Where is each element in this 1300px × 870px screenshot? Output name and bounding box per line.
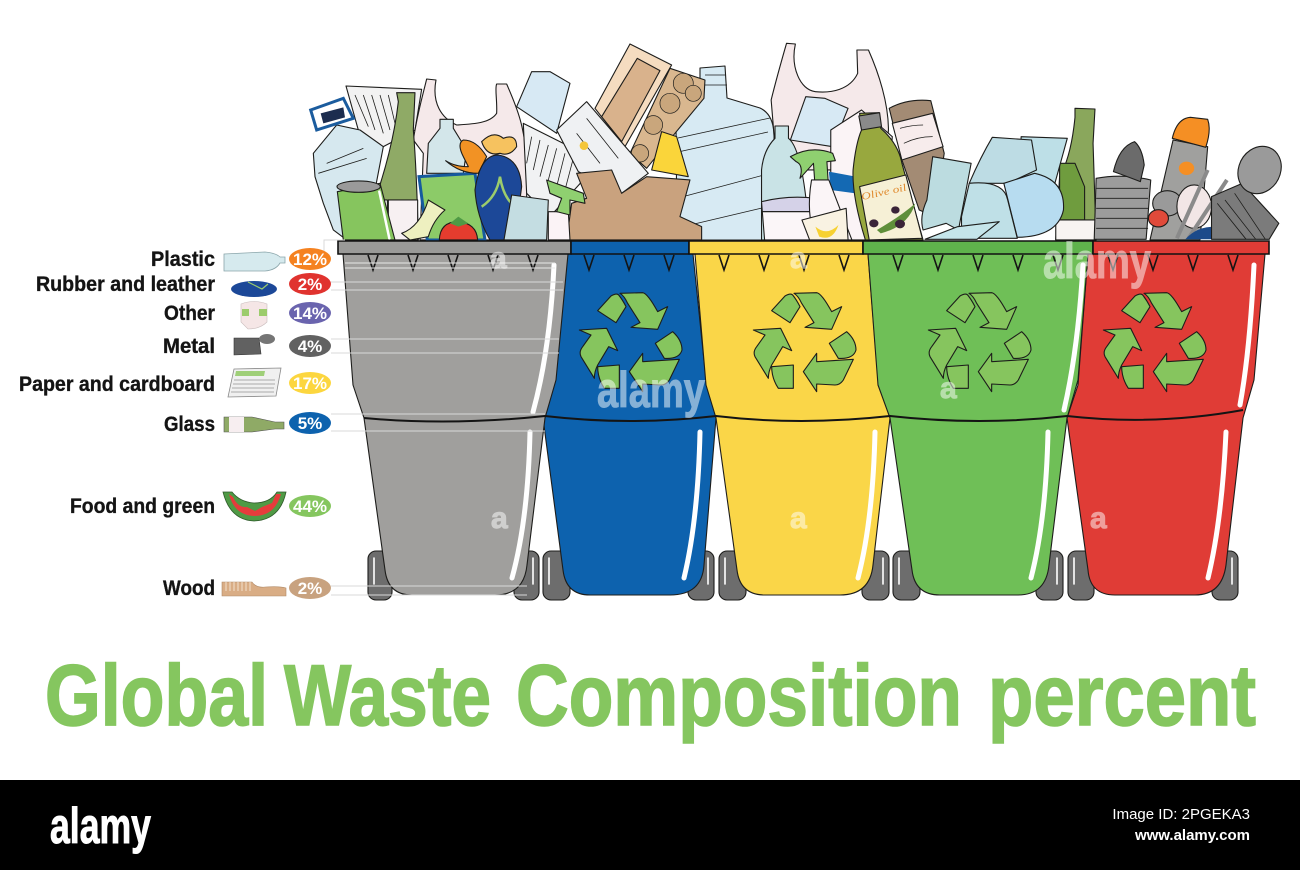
legend: Paper and cardboard: 17%: [293, 374, 327, 393]
legend: Paper and cardboard: [19, 368, 331, 397]
flip-flop: [475, 155, 522, 240]
legend: Food and green: Food and green: [70, 495, 215, 518]
food board: [419, 173, 485, 240]
legend: Rubber and leather: [36, 273, 331, 297]
legend: Other: Other: [164, 302, 215, 325]
bin separators: [364, 410, 1243, 422]
icon: watermelon: [223, 492, 286, 521]
legend: Wood: Wood: [163, 577, 215, 600]
image watermarks: alamy: [597, 362, 705, 418]
icon: recycling symbol: [753, 293, 856, 392]
bin rims: [338, 241, 1269, 254]
wheels: [368, 551, 1238, 600]
brown bottle: [889, 100, 944, 217]
image watermarks: a: [790, 242, 807, 275]
legend: Plastic: 12%: [293, 250, 327, 269]
legend: Metal: [163, 334, 331, 358]
title: [45, 648, 1256, 744]
scissors and small scraps: [1148, 170, 1227, 239]
icon: tin can: [234, 334, 275, 355]
title: percent: [988, 648, 1256, 744]
water bottle: [762, 126, 815, 240]
legend: Wood: 2%: [298, 579, 322, 598]
food tray: [595, 44, 672, 147]
blue flask: [829, 172, 856, 193]
image watermarks: alamy: [1043, 233, 1151, 289]
tin can: [1094, 142, 1151, 239]
plastic film roll: [790, 97, 848, 147]
image watermarks: a: [940, 372, 957, 405]
legend: Plastic: [151, 248, 331, 271]
left water jug: [311, 98, 383, 240]
orange cap aerosol: [1150, 117, 1209, 240]
glass pieces: [922, 137, 1067, 239]
footer logo: alamy: [50, 798, 151, 854]
legend: Other: [164, 302, 331, 329]
legend: Glass: [164, 412, 331, 436]
legend: Rubber and leather: Rubber and leather: [36, 273, 215, 296]
icon: diaper: [241, 302, 267, 329]
footer bar: [0, 780, 1300, 870]
legend: Plastic: Plastic: [151, 248, 215, 271]
yellow detergent bottle: [652, 132, 688, 177]
image watermarks: a: [491, 502, 508, 535]
icon: recycling symbol: [579, 293, 682, 392]
legend: Glass: Glass: [164, 413, 215, 436]
green bottle: [1056, 108, 1096, 240]
waste pile: right half: [762, 43, 1287, 240]
olive oil bottle: [853, 113, 923, 240]
plastic bag: [413, 79, 527, 240]
waste pile: left half: [311, 44, 705, 240]
rim notches: [368, 255, 1238, 270]
image watermarks: a: [790, 502, 807, 535]
spray bottle: [547, 180, 585, 240]
title: Waste: [284, 648, 491, 744]
big water jug: [676, 66, 774, 240]
image watermarks: a: [490, 242, 507, 275]
newspaper: [523, 123, 583, 217]
crushed can: [1212, 142, 1287, 239]
glass cup: [504, 195, 548, 240]
white plastic bag: [771, 43, 888, 170]
folded newspaper: [557, 102, 648, 193]
green glass bottle: [375, 93, 418, 240]
icon: newspaper: [228, 368, 281, 397]
leader lines: [324, 240, 563, 595]
newspaper behind jug: [346, 86, 422, 147]
icon: glass bottle: [224, 417, 284, 432]
plastic film roll: [517, 72, 570, 133]
bin: red: [1067, 254, 1265, 595]
wheel highlights: [374, 558, 1232, 584]
image watermarks: a: [1090, 502, 1107, 535]
white bottle body: [831, 110, 892, 240]
title: Global: [45, 648, 268, 744]
label on bottle: [388, 200, 418, 240]
legend: Rubber and leather: 2%: [298, 275, 322, 294]
bin: blue: [543, 254, 716, 595]
legend: Glass: 5%: [298, 414, 322, 433]
cardboard box: [567, 170, 702, 240]
legend: Food and green: 44%: [293, 497, 327, 516]
icon: wooden comb: [222, 582, 286, 596]
icon: recycling symbol: [1103, 293, 1206, 392]
legend: Paper and cardboard: Paper and cardboard: [19, 373, 215, 396]
legend: Metal: Metal: [163, 335, 215, 358]
icon: recycling symbol: [928, 293, 1031, 392]
footer url: www.alamy.com: [1134, 827, 1250, 844]
icon: plastic bottle: [224, 252, 285, 271]
spray bottle: [790, 150, 852, 240]
title: Composition: [516, 648, 962, 744]
footer image id: Image ID: 2PGEKA3: [1112, 806, 1250, 823]
legend: Other: 14%: [293, 304, 327, 323]
banana tub: [802, 208, 848, 240]
bin: green: [868, 254, 1088, 595]
egg carton: [630, 68, 705, 168]
bin: grey: [343, 254, 568, 595]
green drink can: [337, 181, 395, 240]
tomato: [439, 217, 478, 240]
orange peel: [446, 140, 487, 173]
legend: Food and green: [70, 492, 331, 521]
icon: flip-flop: [231, 281, 277, 297]
legend: Metal: 4%: [298, 337, 322, 356]
small water bottle: [427, 119, 467, 173]
image watermarks: [490, 233, 1151, 535]
bin: yellow: [695, 254, 890, 595]
apple core: [402, 200, 445, 240]
legend: Wood: [163, 577, 331, 600]
olive oil bottle: Olive oil: [860, 182, 908, 203]
